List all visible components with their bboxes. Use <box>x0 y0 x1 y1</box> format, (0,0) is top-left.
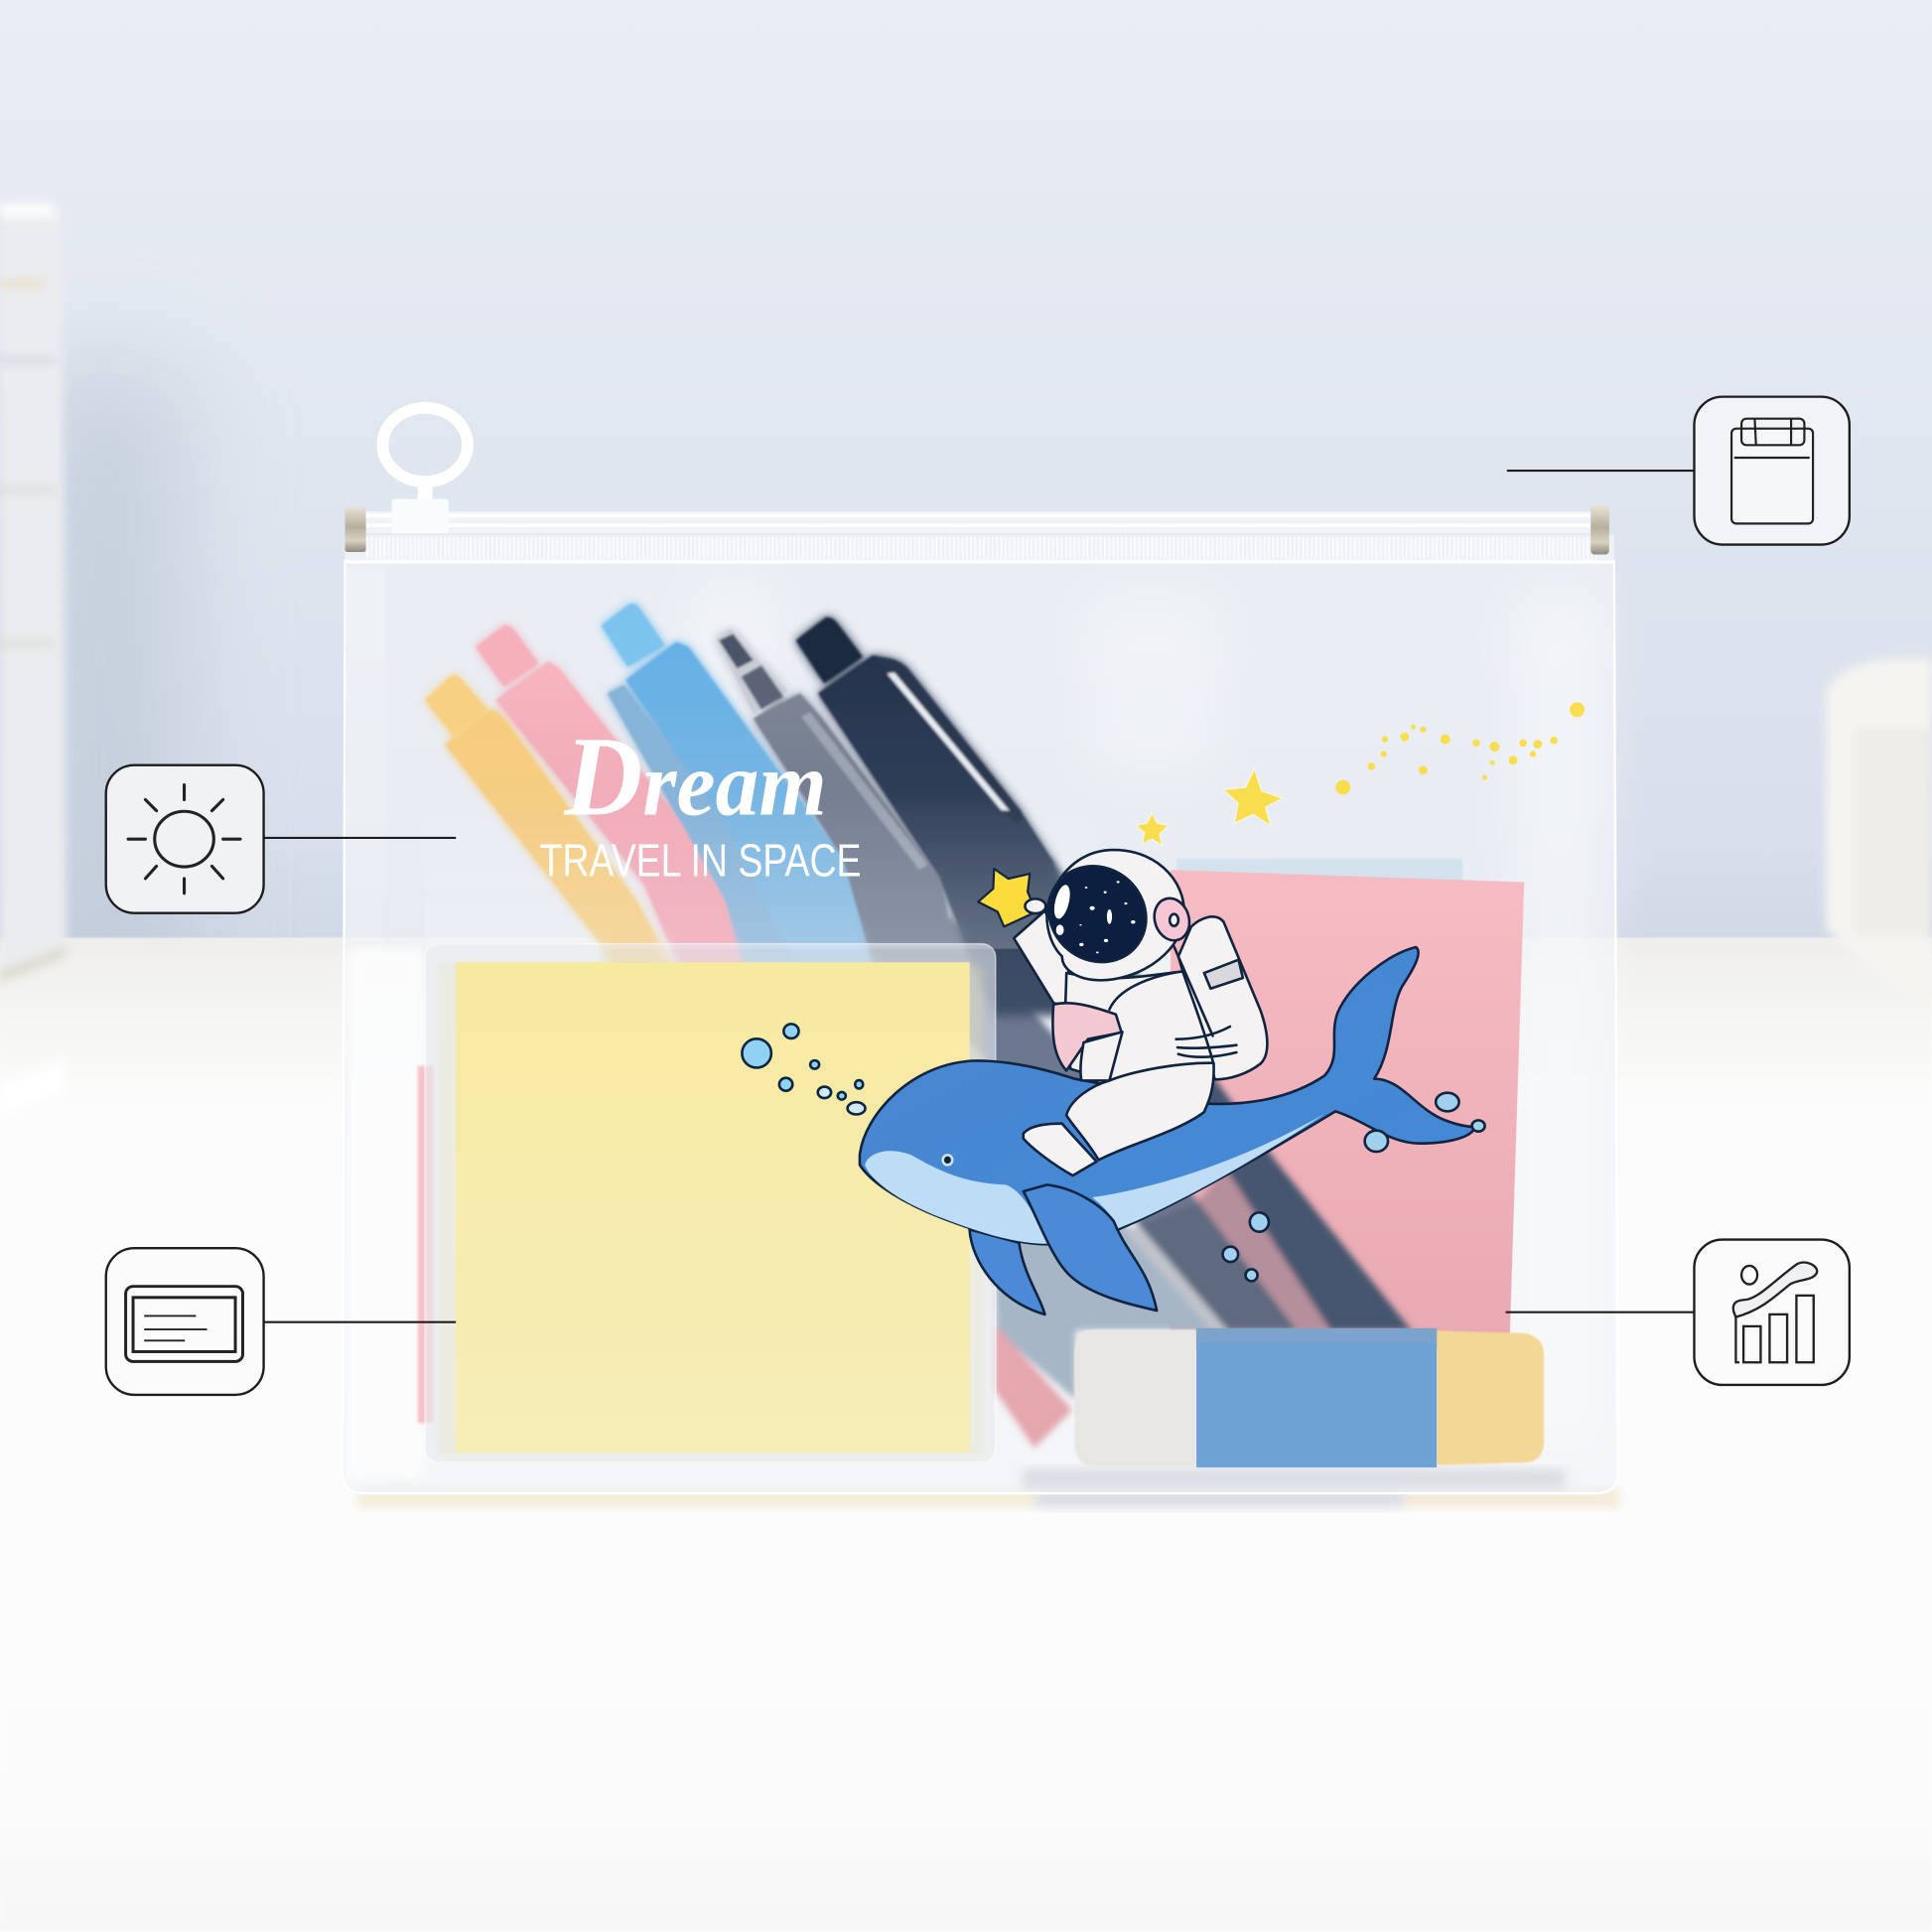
product infographic scene <box>0 0 1932 1513</box>
clear sticky-note holder <box>425 944 996 1462</box>
background wall <box>0 0 1932 955</box>
boot <box>1024 1124 1096 1175</box>
frost veil over lower pens <box>425 788 1090 949</box>
background table <box>0 937 1932 1932</box>
callout: right chart icon <box>1506 1240 1850 1385</box>
star dust dots <box>1335 702 1585 794</box>
clipboard glyph <box>1731 419 1813 523</box>
whale front flipper <box>1024 1184 1157 1311</box>
zipper pull ring and slider <box>382 408 468 533</box>
blurred pen bodies below the whale <box>822 860 1412 1448</box>
eraser <box>1074 1328 1544 1467</box>
whale and astronaut print <box>860 850 1485 1314</box>
leader line <box>1506 1311 1694 1313</box>
callout: top right clipboard icon <box>1507 397 1850 545</box>
leg <box>1066 1063 1214 1160</box>
zipper right metal stop <box>1590 505 1609 554</box>
pens behind frosted film <box>425 604 1081 1016</box>
frosted streaks <box>690 579 1601 1453</box>
star held in hand <box>978 869 1036 926</box>
visor highlights and stars <box>1051 881 1135 953</box>
leader line <box>264 1321 456 1323</box>
pink book <box>1052 1003 1122 1070</box>
chest straps <box>1109 946 1236 1057</box>
blurred shelf on the left <box>0 204 67 1118</box>
whale belly head section <box>865 1151 1049 1244</box>
pink note pad <box>1171 870 1524 1349</box>
card glyph <box>126 1287 242 1361</box>
connecting pen bodies <box>822 936 1123 1238</box>
blurred box on the right <box>1826 658 1932 1017</box>
ear piece <box>1151 897 1192 942</box>
eraser yellow end <box>1437 1330 1544 1465</box>
callout: left card icon <box>106 1248 456 1395</box>
icon tile <box>106 765 264 913</box>
eraser blue sleeve <box>1196 1328 1437 1467</box>
torso <box>1065 971 1213 1080</box>
growth chart glyph <box>1733 1262 1817 1362</box>
soft shadow beneath the pouch <box>357 1488 1620 1508</box>
sharper upper pen ends <box>424 602 1054 957</box>
pale pink stick along left edge <box>418 1066 434 1423</box>
callout: left sun icon <box>106 765 456 913</box>
large star <box>1223 768 1283 826</box>
yellow sticky note <box>456 962 970 1452</box>
soft glow of pen bodies <box>425 604 1081 1016</box>
sticky note tint on the holder <box>439 964 983 1456</box>
gold star trail <box>1136 702 1585 845</box>
pale blue paper behind the note <box>1176 859 1462 883</box>
pale lower-left pouch area <box>347 949 424 1478</box>
forearm <box>1080 1032 1122 1080</box>
backpack <box>1178 916 1267 1079</box>
tagline: TRAVEL IN SPACE <box>540 834 862 886</box>
eraser white end <box>1074 1329 1196 1466</box>
wall shading near the shelf <box>25 369 185 1059</box>
whale belly rear section <box>1092 1114 1324 1228</box>
bubbles above the whale <box>742 1024 866 1114</box>
whale eye <box>943 1155 952 1165</box>
printed slogan <box>540 713 862 886</box>
grey floor of pouch below eraser <box>1023 1468 1565 1488</box>
zipper track <box>345 511 1614 562</box>
small star <box>1136 813 1169 845</box>
astronaut <box>978 850 1267 1175</box>
raised arm <box>1014 910 1068 1010</box>
zipper left metal stop <box>345 506 366 552</box>
helmet <box>1046 850 1184 980</box>
visor <box>1039 860 1156 968</box>
pouch left fold strip <box>346 567 385 1484</box>
icon tile <box>1694 397 1850 545</box>
tail bubbles <box>1223 1093 1485 1281</box>
icon tile <box>106 1248 264 1395</box>
glove <box>1025 898 1045 913</box>
pouch outer edge <box>343 561 1618 1493</box>
leader line <box>1507 470 1694 472</box>
script word Dream: Dream <box>563 713 827 839</box>
icon tile <box>1694 1240 1850 1385</box>
whale rear flipper <box>970 1229 1044 1314</box>
leader line <box>264 837 456 839</box>
sun glyph <box>128 785 240 894</box>
whale body <box>860 947 1475 1244</box>
pouch body back layer <box>343 561 1618 1493</box>
